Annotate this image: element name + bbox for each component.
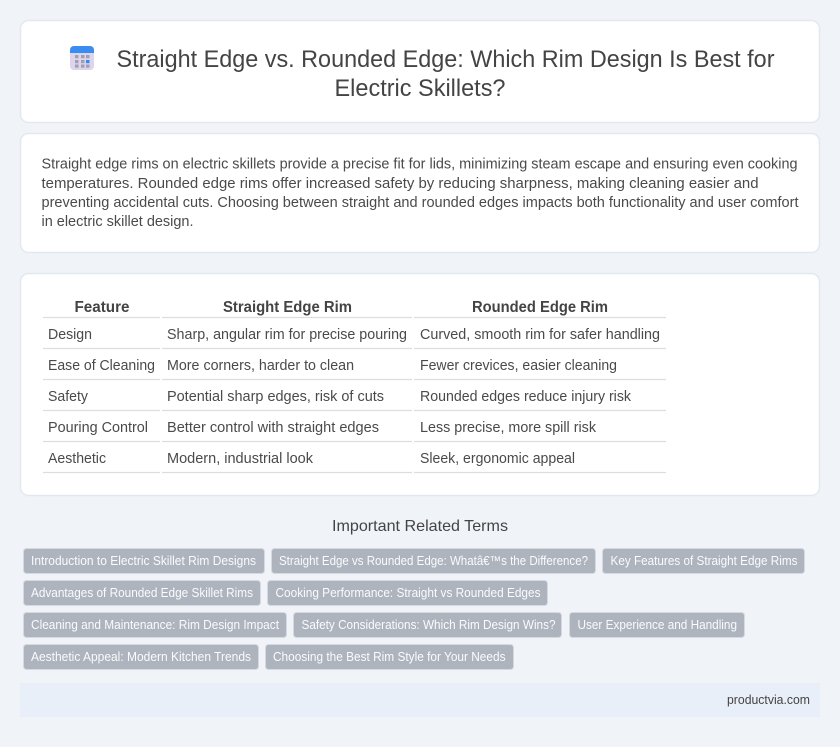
chip bbox=[24, 644, 258, 670]
text block: summary: Straight edge rims on electric skillets provide a precise fit for lids, minimizing steam escape and ensuring even cooking bbox=[42, 156, 798, 172]
chip bbox=[272, 548, 596, 574]
table row: ease of cleaning bbox=[48, 358, 617, 374]
table row: ease of cleaning: Ease of Cleaning bbox=[48, 358, 155, 374]
text block: summary: temperatures. Rounded edge rims offer increased safety by reducing sharpness, making cleaning easier and bbox=[42, 176, 758, 192]
table header row: Straight Edge Rim bbox=[223, 299, 352, 316]
table row: pouring control: Pouring Control bbox=[48, 420, 148, 436]
panel: comparison table bbox=[20, 274, 820, 496]
title: Straight Edge vs. Rounded Edge: Which Rim Design Is Best for bbox=[116, 46, 774, 73]
chip: Advantages of Rounded Edge Skillet Rims bbox=[31, 586, 253, 600]
chip: Straight Edge vs Rounded Edge: Whatâ€™s the Difference? bbox=[279, 554, 588, 568]
chip bbox=[266, 644, 514, 670]
chip bbox=[294, 612, 562, 638]
text block: summary: in electric skillet design. bbox=[42, 214, 194, 230]
title: Electric Skillets? bbox=[334, 75, 506, 102]
table row: pouring control bbox=[48, 420, 597, 436]
table header row: Rounded Edge Rim bbox=[472, 299, 608, 316]
table row: design bbox=[48, 327, 660, 343]
text block: summary bbox=[42, 156, 798, 230]
table row: aesthetic: Sleek, ergonomic appeal bbox=[420, 451, 575, 467]
table row: ease of cleaning: More corners, harder to clean bbox=[167, 358, 354, 374]
table row: safety bbox=[48, 389, 632, 405]
table row: design: Curved, smooth rim for safer handling bbox=[420, 327, 660, 343]
table header row: Feature bbox=[74, 299, 130, 316]
table header row bbox=[74, 299, 608, 316]
chip: Key Features of Straight Edge Rims bbox=[610, 554, 798, 568]
table row: aesthetic: Modern, industrial look bbox=[167, 451, 314, 467]
chip: User Experience and Handling bbox=[578, 618, 737, 632]
chip: Introduction to Electric Skillet Rim Designs bbox=[31, 554, 256, 568]
table row: pouring control: Less precise, more spill risk bbox=[420, 420, 597, 436]
chip bbox=[24, 580, 260, 606]
panel: summary paragraph bbox=[20, 134, 820, 252]
chip: Safety Considerations: Which Rim Design Wins? bbox=[302, 618, 556, 632]
table row: ease of cleaning: Fewer crevices, easier cleaning bbox=[420, 358, 617, 374]
chip bbox=[24, 612, 286, 638]
chip: Cooking Performance: Straight vs Rounded Edges bbox=[276, 586, 540, 600]
chip: Cleaning and Maintenance: Rim Design Impact bbox=[31, 618, 279, 632]
heading: important related terms: Important Related Terms bbox=[332, 518, 508, 535]
related term chips bbox=[24, 548, 804, 670]
table row: safety: Rounded edges reduce injury risk bbox=[420, 389, 632, 405]
chip bbox=[24, 548, 264, 574]
table row: aesthetic bbox=[48, 451, 575, 467]
chip: Choosing the Best Rim Style for Your Needs bbox=[273, 650, 506, 664]
panel: header bbox=[20, 20, 820, 122]
text block: summary: preventing accidental cuts. Choosing between straight and rounded edges impacts both functionality and user comfort bbox=[42, 195, 798, 211]
table row: design: Design bbox=[48, 327, 92, 343]
chip bbox=[570, 612, 744, 638]
title bbox=[116, 46, 774, 102]
footer source text: productvia.com bbox=[727, 692, 810, 707]
chip: Aesthetic Appeal: Modern Kitchen Trends bbox=[31, 650, 251, 664]
table row: pouring control: Better control with straight edges bbox=[167, 420, 379, 436]
table row: safety: Safety bbox=[48, 389, 89, 405]
table row: safety: Potential sharp edges, risk of cuts bbox=[167, 389, 384, 405]
table row: aesthetic: Aesthetic bbox=[48, 451, 106, 467]
chip bbox=[268, 580, 548, 606]
table row: design: Sharp, angular rim for precise pouring bbox=[167, 327, 407, 343]
footer bar bbox=[20, 683, 820, 717]
icon: calendar grid bbox=[70, 46, 94, 70]
chip bbox=[602, 548, 804, 574]
